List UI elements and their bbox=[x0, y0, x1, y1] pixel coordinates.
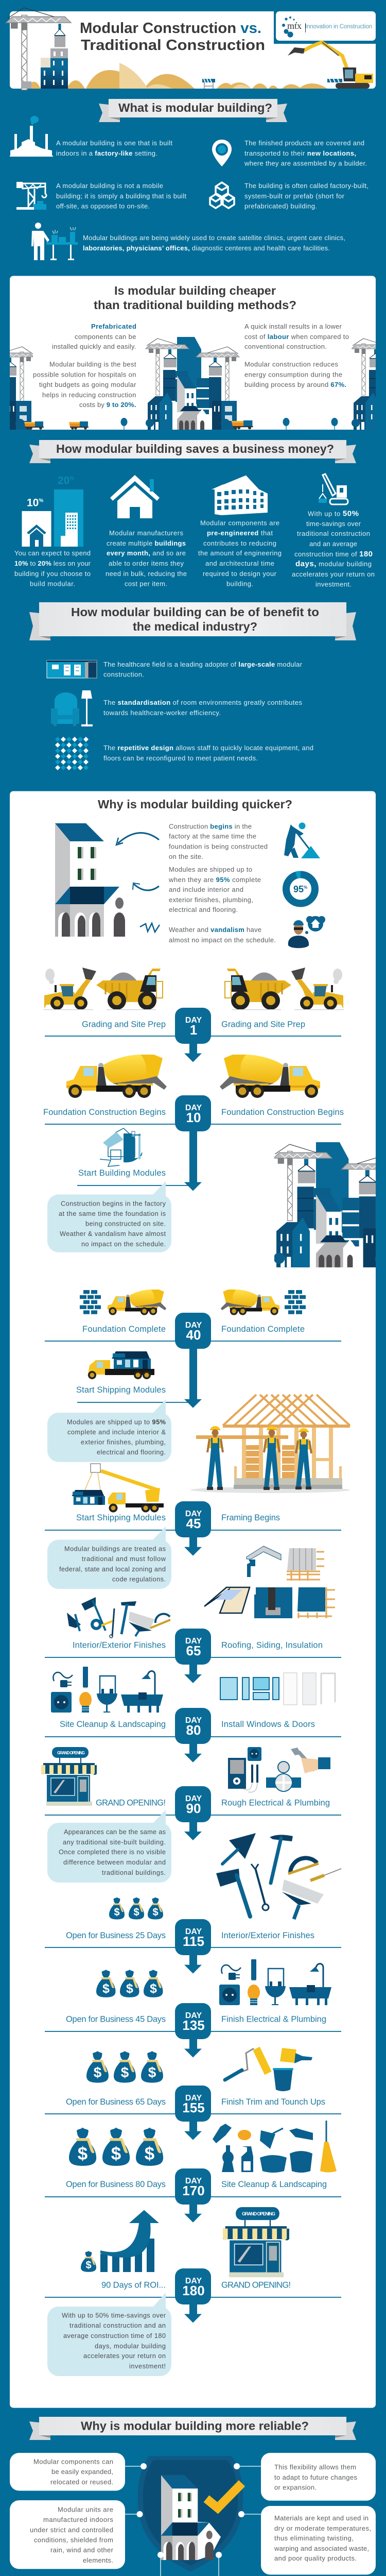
logo card bbox=[276, 11, 376, 41]
text: factory-like: A modular building is one that is built bbox=[56, 139, 172, 147]
callout: shipping: exterior finishes, plumbing, bbox=[81, 1438, 166, 1446]
money bags: 80 days: $ bbox=[111, 2144, 121, 2164]
left text: costs by 9 to 20%. bbox=[79, 401, 136, 409]
timeline: day 170: DAY bbox=[185, 2177, 202, 2185]
text column: spend less: 10% to 20% less on your bbox=[14, 560, 91, 567]
text column: time savings: traditional construction bbox=[297, 530, 370, 537]
box: indoors: rain, wind and other bbox=[50, 2546, 114, 2554]
icons: large tools bbox=[216, 1833, 341, 1919]
callout: appearances: any traditional site-built building. bbox=[63, 1838, 166, 1846]
icon: growth chart bbox=[81, 2210, 159, 2272]
left text: Modular building is the best bbox=[49, 361, 136, 368]
icon: module cutaway bbox=[100, 1128, 142, 1166]
heading bbox=[94, 284, 296, 312]
text column: pre-engineered: building. bbox=[226, 580, 253, 587]
text: large-scale: construction. bbox=[103, 671, 144, 679]
text: repetitive design: floors can be reconfigured to meet patient needs. bbox=[103, 754, 258, 762]
banner: saves money bbox=[29, 440, 356, 463]
timeline: day 45: 45 bbox=[186, 1516, 201, 1531]
timeline: day 170 bbox=[45, 2168, 341, 2223]
icons: roofing materials bbox=[204, 1546, 335, 1618]
icon: armchair and lamp bbox=[51, 690, 93, 726]
mixer trucks large bbox=[66, 1055, 320, 1098]
panel: why quicker timeline bbox=[10, 791, 386, 2408]
timeline: day 65: DAY bbox=[185, 1637, 202, 1646]
icon: store grand opening bbox=[41, 1747, 97, 1806]
callout: shipping bbox=[47, 1399, 171, 1462]
logo card: mtx bbox=[287, 21, 302, 31]
text: 95 percent: Modules are shipped up to bbox=[169, 866, 252, 873]
callout: shipping: complete and include interior & bbox=[67, 1428, 166, 1436]
callout: roi: days, modular building bbox=[95, 2342, 166, 2350]
chart: 10 to 20 percent bars: 20 bbox=[58, 475, 69, 486]
text column: pre-engineered: Modular components are bbox=[200, 519, 279, 527]
icon: cubes bbox=[210, 182, 234, 208]
dump trucks bbox=[24, 420, 253, 430]
timeline: day 90 bbox=[45, 1786, 341, 1840]
text column: time savings: days, modular building bbox=[295, 560, 372, 568]
money bags: 25 days: $ bbox=[152, 1907, 159, 1918]
timeline: day 10 bbox=[43, 1095, 344, 1191]
header title: Modular Construction vs. bbox=[80, 20, 261, 37]
icon: diamond pattern bbox=[55, 737, 89, 770]
timeline: day 45: DAY bbox=[185, 1510, 202, 1518]
icon: crane and bricks bbox=[16, 182, 46, 210]
text: standardisation: towards healthcare-worker efficiency. bbox=[103, 709, 221, 717]
text column: spend less: building if you choose to bbox=[14, 570, 91, 578]
barriers bbox=[202, 79, 342, 89]
text column: spend less: build modular. bbox=[30, 580, 75, 587]
callout: factory: no impact on the schedule. bbox=[81, 1240, 166, 1248]
icon: crawler crane bbox=[319, 474, 348, 504]
text: prefab: The building is often called factory-built, bbox=[244, 182, 369, 190]
money bags: 45 days bbox=[96, 1970, 163, 1997]
box: materials: warping and associated waste, bbox=[274, 2545, 369, 2552]
text column: time savings: time-savings over bbox=[306, 520, 361, 528]
box: indoors: under strict and controlled bbox=[30, 2526, 113, 2534]
city illustration bbox=[146, 337, 239, 430]
text: new locations: transported to their new locations, bbox=[244, 149, 356, 157]
icon: thief thinking of house bbox=[288, 916, 325, 948]
city illustration large bbox=[274, 1142, 386, 1267]
icon: apartment building bbox=[212, 475, 268, 515]
money bags: 65 days: $ bbox=[148, 2064, 156, 2080]
box: expanded: be easily expanded, bbox=[51, 2468, 113, 2476]
icons: finish electrical and plumbing bbox=[219, 1959, 331, 2005]
box: flexibility: This flexibility allows them bbox=[274, 2463, 356, 2471]
text: begins bbox=[169, 823, 268, 860]
header title: Traditional Construction bbox=[81, 37, 265, 54]
left text bbox=[33, 323, 136, 409]
timeline: day 45: Framing Begins bbox=[221, 1513, 280, 1522]
right text: energy consumption during the bbox=[244, 371, 342, 378]
timeline: day 40: Foundation Complete bbox=[82, 1325, 166, 1334]
text: off-site: off-site, as opposed to on-site. bbox=[56, 202, 150, 210]
text: factory-like bbox=[56, 139, 172, 157]
banner: more reliable bbox=[29, 2417, 356, 2440]
timeline: day 90: 90 bbox=[186, 1801, 201, 1816]
icons: rough electrical and plumbing bbox=[228, 1747, 330, 1792]
icons: cleaning supplies bbox=[213, 2121, 337, 2173]
text: begins: foundation is being constructed bbox=[169, 843, 268, 850]
money bags: 80 days bbox=[69, 2128, 163, 2166]
logo card: Innovation in Construction bbox=[305, 24, 372, 30]
box: materials bbox=[261, 2506, 376, 2574]
timeline: day 180 bbox=[45, 2268, 341, 2323]
text column: bulk orders: need in bulk, reducing the bbox=[106, 570, 187, 578]
text column: pre-engineered bbox=[198, 519, 282, 587]
money bags: 45 days: $ bbox=[150, 1981, 157, 1996]
label: Start Shipping Modules bbox=[76, 1385, 166, 1395]
timeline: day 65: Interior/Exterior Finishes bbox=[73, 1640, 166, 1650]
text: vandalism: Weather and vandalism have bbox=[169, 926, 261, 934]
icon: growth chart: $ bbox=[85, 2260, 92, 2271]
timeline: day 170: Site Cleanup & Landscaping bbox=[221, 2180, 327, 2189]
chart: 10 to 20 percent bars: 10 bbox=[27, 497, 39, 509]
timeline: day 170: Open for Business 80 Days bbox=[66, 2180, 166, 2189]
text: new locations bbox=[244, 139, 367, 167]
heading: Is modular building cheaper bbox=[114, 284, 276, 297]
banner: medical industry: the medical industry? bbox=[133, 620, 257, 633]
banner: saves money: How modular building saves a business money? bbox=[56, 442, 334, 455]
trees bbox=[120, 418, 338, 430]
icon: crane truck lifting module bbox=[72, 1464, 164, 1513]
heading: Why is modular building quicker? bbox=[98, 798, 292, 811]
timeline: day 80: 80 bbox=[186, 1722, 201, 1738]
callout: regulations: traditional and must follow bbox=[82, 1555, 166, 1563]
timeline: day 65 bbox=[45, 1629, 341, 1683]
left text: installed quickly and easily. bbox=[52, 343, 136, 350]
city cropped right bbox=[352, 338, 376, 430]
box: indoors: elements. bbox=[83, 2556, 113, 2564]
timeline: day 80: Site Cleanup & Landscaping bbox=[60, 1720, 166, 1729]
text column: pre-engineered: and architectural time bbox=[205, 560, 274, 567]
timeline: day 45: Start Shipping Modules bbox=[76, 1513, 166, 1522]
text column: bulk orders: create multiple buildings bbox=[107, 539, 186, 547]
money bags: 65 days: $ bbox=[94, 2064, 102, 2080]
box: materials: dry or moderate temperatures, bbox=[274, 2524, 371, 2532]
text: standardisation: The standardisation of room environments greatly contributes bbox=[103, 699, 303, 706]
box: expanded: Modular components can bbox=[33, 2458, 113, 2466]
timeline: day 155: 155 bbox=[182, 2100, 205, 2115]
text column: spend less bbox=[14, 549, 91, 587]
callout: roi: With up to 50% time-savings over bbox=[62, 2312, 166, 2319]
bricks and mixers bbox=[80, 1290, 306, 1315]
money bags: 25 days bbox=[109, 1897, 163, 1920]
connector lines bbox=[125, 2463, 261, 2576]
money bags: 65 days bbox=[86, 2051, 163, 2082]
timeline: day 1 bbox=[45, 1008, 341, 1062]
box: flexibility: to adapt to future changes bbox=[274, 2473, 357, 2481]
icon: house bbox=[110, 475, 160, 518]
chart: 95 percent donut bbox=[286, 874, 315, 904]
timeline: day 1: DAY bbox=[185, 1016, 202, 1025]
box: expanded: relocated or reused. bbox=[50, 2478, 113, 2486]
timeline: day 135: Open for Business 45 Days bbox=[66, 2015, 166, 2024]
banner: medical industry bbox=[29, 602, 356, 640]
icon: factory bbox=[10, 116, 53, 157]
money bags: 25 days: $ bbox=[114, 1907, 120, 1918]
text column: pre-engineered: pre-engineered that bbox=[207, 529, 273, 537]
banner: more reliable: Why is modular building more reliable? bbox=[81, 2419, 309, 2433]
left text: components can be bbox=[75, 333, 136, 341]
callout: regulations: Modular buildings are treated as bbox=[64, 1545, 166, 1553]
text column: bulk orders: able to order items they bbox=[109, 560, 184, 567]
timeline: day 1: 1 bbox=[190, 1022, 197, 1038]
text: large-scale bbox=[103, 660, 303, 679]
timeline: day 135: Finish Electrical & Plumbing bbox=[221, 2015, 326, 2024]
callout: factory: Weather & vandalism have almost bbox=[60, 1230, 166, 1238]
chart: 95 percent donut: % bbox=[304, 885, 307, 890]
text column: bulk orders bbox=[106, 529, 187, 587]
timeline: day 115: 115 bbox=[183, 1934, 204, 1949]
header title bbox=[80, 20, 265, 54]
icons: electrical and plumbing bbox=[51, 1667, 163, 1713]
callout: roi: average construction time of 180 bbox=[63, 2332, 166, 2340]
grading vehicles bbox=[44, 968, 344, 1010]
text column: time savings: accelerates your return on bbox=[292, 570, 375, 578]
left text: helps in reducing construction bbox=[42, 391, 136, 399]
text: 95 percent: and include interior and bbox=[169, 886, 243, 893]
callout: roi: traditional construction and an bbox=[69, 2321, 166, 2329]
header panel bbox=[6, 8, 376, 90]
callout: factory: at the same time the foundation is bbox=[59, 1210, 166, 1217]
panel: cheaper bbox=[0, 276, 386, 430]
callout: roi: investment! bbox=[129, 2362, 166, 2370]
sand mounds bbox=[27, 63, 327, 89]
money bags: 65 days: $ bbox=[121, 2064, 129, 2080]
box: indoors: manufactured indoors bbox=[43, 2516, 113, 2523]
box: materials: thus eliminating twisting, bbox=[274, 2534, 354, 2542]
box: flexibility bbox=[261, 2453, 376, 2501]
timeline: day 80 bbox=[45, 1708, 341, 1762]
callout: regulations: federal, state and local zoning and bbox=[59, 1565, 166, 1573]
timeline: day 1: Grading and Site Prep bbox=[82, 1020, 166, 1029]
right text: A quick install results in a lower bbox=[244, 323, 342, 330]
timeline: day 115: Open for Business 25 Days bbox=[66, 1931, 166, 1940]
timeline: day 90: DAY bbox=[185, 1794, 202, 1803]
timeline: day 115: Interior/Exterior Finishes bbox=[221, 1931, 314, 1940]
text: repetitive design: The repetitive design allows staff to quickly locate equipment, and bbox=[103, 744, 313, 752]
callout: factory: Construction begins in the factory bbox=[61, 1199, 166, 1207]
callout: roi: accelerates your return on bbox=[83, 2352, 166, 2360]
timeline: day 135 bbox=[45, 2003, 341, 2058]
text: prefab: system-built or prefab (short for bbox=[244, 192, 345, 200]
timeline: day 90: Rough Electrical & Plumbing bbox=[221, 1798, 330, 1807]
timeline: day 180: GRAND OPENING! bbox=[221, 2280, 291, 2290]
text: begins: on the site. bbox=[169, 853, 203, 860]
box: indoors bbox=[10, 2500, 125, 2569]
icon: modular unit bbox=[47, 660, 97, 678]
box: flexibility: or expansion. bbox=[274, 2484, 317, 2492]
callout: appearances: Once completed there is no visible bbox=[59, 1848, 166, 1856]
callout: shipping: Modules are shipped up to 95% bbox=[67, 1418, 166, 1426]
timeline: day 40: 40 bbox=[186, 1327, 201, 1343]
timeline: day 180: DAY bbox=[185, 2277, 202, 2285]
header building bbox=[41, 48, 68, 89]
text: off-site: building; it is simply a building that is built bbox=[56, 192, 186, 200]
text column: time savings: and an average bbox=[309, 540, 357, 548]
label: GRAND OPENING! bbox=[96, 1798, 166, 1807]
text column: time savings: With up to 50% bbox=[308, 509, 359, 518]
text: new locations: where they are assembled by a builder. bbox=[244, 160, 367, 167]
header crane bbox=[6, 8, 71, 90]
timeline: day 180: 90 Days of ROI... bbox=[101, 2280, 166, 2290]
money bags: 80 days: $ bbox=[78, 2144, 87, 2164]
text column: time savings: construction time of 180 bbox=[294, 550, 373, 558]
icon: person at table bbox=[31, 223, 78, 260]
text column: bulk orders: every month, and so are bbox=[107, 549, 186, 557]
text: off-site bbox=[56, 182, 186, 210]
box: indoors: Modular units are bbox=[58, 2506, 113, 2513]
timeline: day 10: Foundation Construction Begins bbox=[43, 1108, 166, 1117]
text: healthcare uses: Modular buildings are being widely used to create satellite clinics, urgent care clinics, bbox=[83, 234, 345, 242]
money bags: 45 days: $ bbox=[102, 1981, 110, 1996]
city cropped left bbox=[10, 346, 33, 430]
text: begins: factory at the same time the bbox=[169, 833, 256, 840]
text: off-site: A modular building is not a mobile bbox=[56, 182, 163, 190]
timeline: day 155 bbox=[45, 2086, 341, 2140]
timeline: day 10: Foundation Construction Begins bbox=[221, 1108, 344, 1117]
text: 95 percent bbox=[168, 866, 261, 913]
text: 95 percent: exterior finishes, plumbing, bbox=[169, 896, 253, 904]
timeline: day 65: 65 bbox=[186, 1643, 201, 1658]
timeline: day 40: DAY bbox=[185, 1321, 202, 1330]
icon: location pin bbox=[212, 140, 232, 166]
text column: bulk orders: cost per item. bbox=[125, 580, 167, 587]
timeline: day 115: DAY bbox=[185, 1927, 202, 1936]
callout: appearances: difference between modular and bbox=[63, 1858, 166, 1866]
banner: medical industry: How modular building can be of benefit to bbox=[71, 605, 319, 619]
timeline: day 45 bbox=[45, 1501, 341, 1556]
arrows: cycle bbox=[116, 833, 160, 932]
callout: shipping: electrical and flooring. bbox=[97, 1448, 166, 1456]
timeline: day 80: Install Windows & Doors bbox=[221, 1720, 315, 1729]
text column: time savings bbox=[292, 509, 375, 588]
icon: store grand opening 2: GRAND OPENING bbox=[242, 2211, 275, 2216]
illustration: shield bbox=[138, 2456, 243, 2572]
text column: pre-engineered: required to design your bbox=[203, 570, 277, 578]
money bags: 80 days: $ bbox=[145, 2144, 154, 2164]
callout: regulations bbox=[47, 1526, 171, 1589]
banner: what is modular building: What is modular building? bbox=[118, 101, 272, 114]
callout: factory bbox=[47, 1181, 171, 1252]
callout: regulations: code regulations. bbox=[112, 1575, 166, 1583]
callout: appearances: traditional buildings. bbox=[102, 1869, 166, 1876]
chart: 95 percent donut: 95 bbox=[293, 884, 304, 894]
money bags: 45 days: $ bbox=[126, 1981, 133, 1996]
money bags: 25 days: $ bbox=[133, 1907, 139, 1918]
text: prefab: prefabricated) building. bbox=[244, 202, 317, 210]
timeline: day 155: DAY bbox=[185, 2094, 202, 2103]
left text: Prefabricated bbox=[91, 323, 136, 330]
icon: worker shovelling bbox=[284, 822, 320, 858]
icon: store grand opening: GRAND OPENING bbox=[57, 1751, 85, 1755]
illustration: modular building bbox=[55, 823, 125, 937]
right text bbox=[244, 323, 349, 388]
right text: building process by around 67%. bbox=[244, 381, 346, 388]
text: prefab bbox=[244, 182, 369, 210]
timeline: day 155: Finish Trim and Tounch Ups bbox=[221, 2097, 325, 2107]
timeline: day 135: 135 bbox=[182, 2018, 205, 2033]
excavator bbox=[288, 42, 373, 89]
banner: what is modular building bbox=[99, 99, 287, 122]
text column: pre-engineered: the amount of engineering bbox=[198, 549, 282, 557]
timeline: day 1: Grading and Site Prep bbox=[221, 1020, 305, 1029]
chart: 10 to 20 percent bars: % bbox=[69, 476, 74, 481]
callout: roi bbox=[47, 2293, 171, 2376]
timeline: day 40: Foundation Complete bbox=[221, 1325, 305, 1334]
text: 95 percent: when they are 95% complete bbox=[168, 876, 261, 884]
text: healthcare uses: laboratories, physicians’ offices, diagnostic centeres and health care facilities. bbox=[83, 244, 330, 252]
text: large-scale: The healthcare field is a leading adopter of large-scale modular bbox=[103, 660, 303, 668]
icons: windows and doors bbox=[220, 1673, 335, 1705]
timeline: day 80: DAY bbox=[185, 1716, 202, 1725]
icons: paint tools bbox=[225, 2048, 312, 2091]
callout: appearances bbox=[47, 1810, 171, 1883]
chart: 10 to 20 percent bars bbox=[22, 475, 83, 547]
box: materials: and poor quality products. bbox=[274, 2554, 357, 2562]
text: new locations: The finished products are covered and bbox=[244, 139, 364, 147]
heading: than traditional building methods? bbox=[94, 298, 296, 312]
illustration: framing with workers bbox=[190, 1395, 350, 1493]
chart: 10 to 20 percent bars: % bbox=[39, 498, 43, 504]
text: factory-like: indoors in a factory-like setting. bbox=[56, 149, 157, 157]
right text: conventional construction. bbox=[244, 343, 327, 350]
text column: spend less: You can expect to spend bbox=[14, 549, 91, 557]
text column: pre-engineered: contributes to reducing bbox=[203, 539, 276, 547]
text: 95 percent: electrical and flooring. bbox=[169, 906, 238, 913]
box: expanded bbox=[10, 2453, 125, 2490]
right text: cost of labour when compared to bbox=[244, 333, 349, 341]
label: Start Building Modules bbox=[78, 1168, 166, 1178]
text column: bulk orders: Modular manufacturers bbox=[109, 529, 183, 537]
timeline: day 180: 180 bbox=[182, 2283, 205, 2298]
icons: finishing tools bbox=[67, 1597, 170, 1638]
text: begins: Construction begins in the bbox=[169, 823, 252, 831]
timeline: day 65: Roofing, Siding, Insulation bbox=[221, 1640, 323, 1650]
timeline: day 10: 10 bbox=[186, 1110, 201, 1125]
timeline: day 115 bbox=[45, 1919, 341, 1974]
timeline: day 10: DAY bbox=[185, 1104, 202, 1112]
icon: truck with module bbox=[87, 1351, 154, 1379]
right text: Modular construction reduces bbox=[244, 361, 339, 368]
box: indoors: conditions, shielded from bbox=[34, 2536, 113, 2544]
timeline: day 155: Open for Business 65 Days bbox=[66, 2097, 166, 2107]
timeline: day 170: 170 bbox=[182, 2183, 205, 2198]
text: vandalism bbox=[169, 926, 276, 944]
left text: possible solution for hospitals on bbox=[33, 371, 136, 378]
text: standardisation bbox=[103, 699, 303, 717]
box: materials: Materials are kept and used in bbox=[274, 2514, 369, 2522]
timeline: day 40 bbox=[45, 1313, 341, 1408]
left text: tight budgets as going modular bbox=[39, 381, 136, 388]
text column: time savings: investment. bbox=[315, 580, 352, 588]
icon: store grand opening 2 bbox=[223, 2207, 289, 2277]
text: healthcare uses bbox=[83, 234, 345, 252]
timeline: day 135: DAY bbox=[185, 2011, 202, 2020]
callout: factory: being constructed on site. bbox=[85, 1220, 166, 1228]
text: vandalism: almost no impact on the schedule. bbox=[169, 936, 276, 944]
callout: appearances: Appearances can be the same as bbox=[64, 1828, 166, 1836]
text: repetitive design bbox=[103, 744, 313, 762]
